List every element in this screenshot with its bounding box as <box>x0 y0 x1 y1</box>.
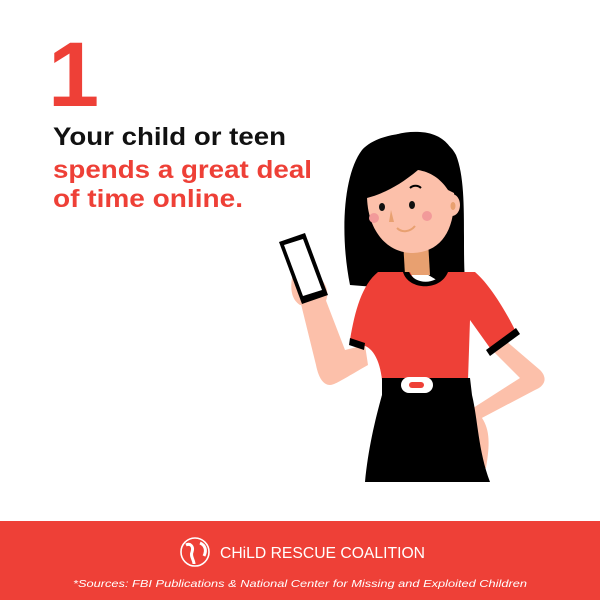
belt buckle <box>401 377 433 393</box>
illustration: woman with phone <box>279 132 545 482</box>
sources: *Sources: FBI Publications & National Center for Missing and Exploited Children <box>73 578 527 590</box>
smile <box>397 226 415 231</box>
ear <box>444 194 460 216</box>
sleeves <box>349 338 365 350</box>
hair back <box>344 133 465 287</box>
headline text <box>53 123 312 213</box>
cheeks <box>369 213 379 223</box>
headline text: spends a great deal <box>53 156 312 184</box>
right arm <box>470 340 545 420</box>
shirt <box>350 272 515 380</box>
hand <box>291 270 327 308</box>
collar <box>403 272 448 286</box>
hand on hip <box>465 410 489 468</box>
brow <box>410 186 421 188</box>
logo globe <box>181 538 209 566</box>
neck <box>403 240 430 275</box>
left arm <box>300 285 368 385</box>
number 1: 1 <box>48 24 99 126</box>
eyes <box>379 203 385 211</box>
headline text: Your child or teen <box>53 123 286 151</box>
skirt <box>365 378 490 482</box>
brand name: CHiLD RESCUE COALITION <box>220 545 425 562</box>
headline text: of time online. <box>53 185 243 213</box>
nose <box>389 210 394 222</box>
face <box>367 160 454 253</box>
footer band <box>0 521 600 600</box>
fringe <box>358 132 459 198</box>
phone <box>279 233 328 304</box>
